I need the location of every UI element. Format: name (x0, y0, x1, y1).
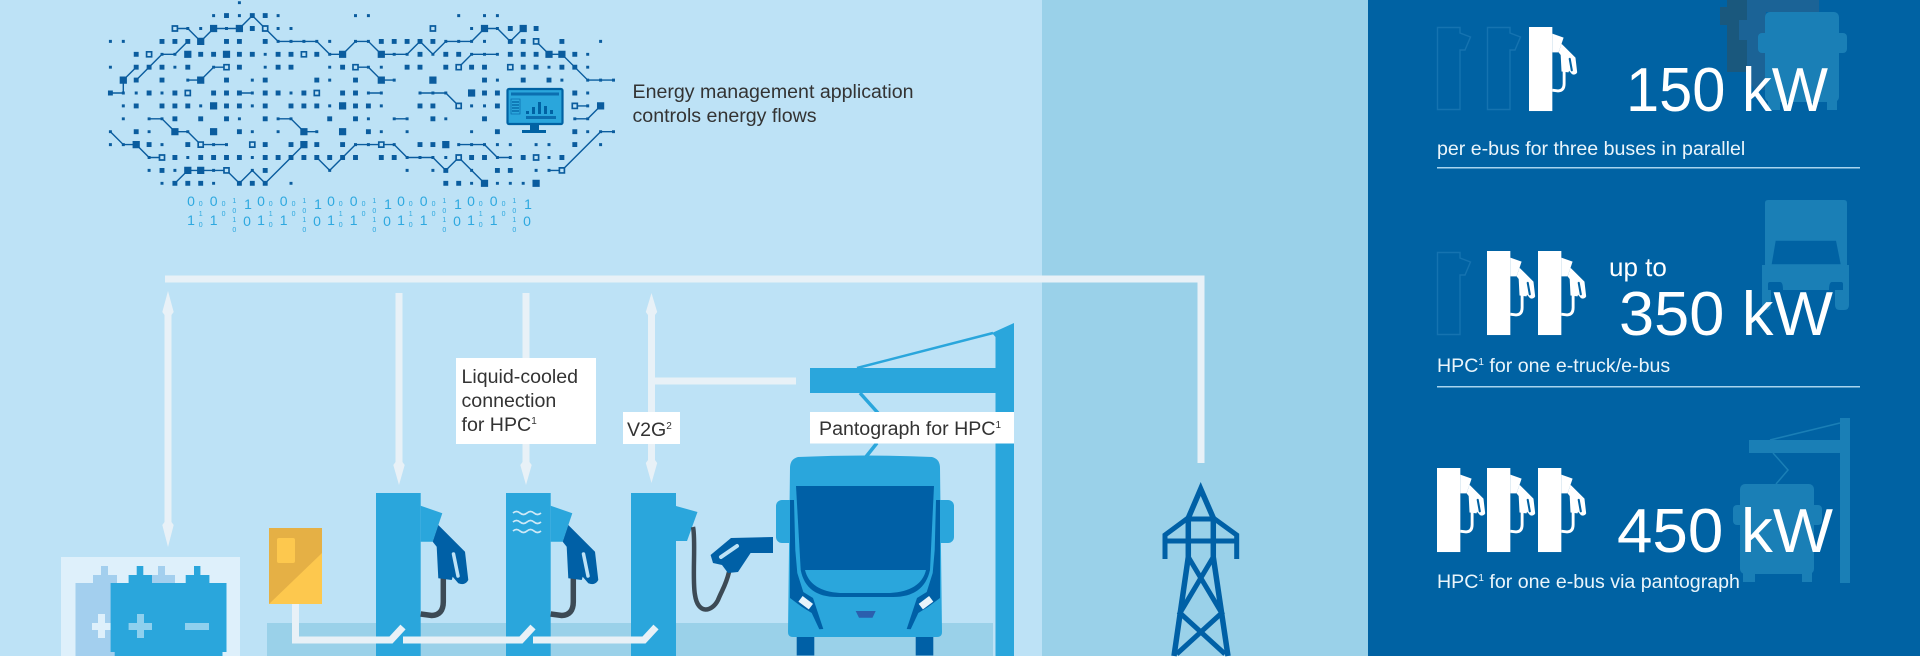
binary digits: 11111 (199, 211, 483, 218)
icon: electric bus (776, 456, 954, 656)
binary digits: 11111 (232, 217, 516, 224)
icon: transmission tower (1163, 489, 1238, 656)
icon: chargers one of three active (1438, 27, 1577, 111)
panel: grid background (1042, 0, 1368, 656)
text: energy management caption: Energy management application (632, 81, 914, 103)
ghost vehicle: pantograph bus (1733, 418, 1850, 583)
panel: power outputs background (1368, 0, 1920, 656)
value: 150 kW: 150 kW (1626, 56, 1828, 125)
charger 1 (376, 493, 468, 656)
value: up to 350 kW: 350 kW (1619, 280, 1833, 349)
value: 450 kW: 450 kW (1617, 497, 1833, 566)
text: HPC one e-bus: for one e-bus via pantograph (1484, 571, 1740, 593)
binary digits: 00000 (222, 211, 506, 218)
icon: battery storage (61, 557, 240, 656)
label: liquid-cooled connection: 1 (531, 416, 537, 427)
text: HPC one e-bus: 1 (1478, 573, 1484, 584)
pantograph gantry (810, 323, 1014, 656)
label: liquid-cooled connection: connection (462, 390, 556, 412)
binary digits: 00000 (243, 213, 531, 229)
text: energy management caption: controls energy flows (632, 105, 817, 127)
label: pantograph: 1 (995, 420, 1001, 431)
binary digits: 11111 (232, 198, 516, 205)
text: HPC one e-bus: HPC (1437, 571, 1478, 593)
label: liquid-cooled connection: Liquid-cooled (462, 366, 578, 388)
label: liquid-cooled connection (456, 358, 596, 444)
icon: chargers two of three active (1438, 251, 1586, 335)
value: up to 350 kW: up to (1609, 252, 1667, 282)
binary digits: 00000 (199, 222, 483, 229)
text: HPC one e-truck: HPC (1437, 355, 1478, 377)
panel: energy management background (0, 0, 1042, 656)
power lines and arrows (162, 276, 1204, 547)
text: HPC one e-truck: for one e-truck/e-bus (1484, 355, 1670, 377)
binary digits (187, 193, 532, 234)
ghost vehicle: three buses (1720, 0, 1847, 110)
charger 3 V2G (631, 493, 773, 656)
row: 350 kW (1437, 251, 1860, 388)
text: per e-bus: per e-bus for three buses in parallel (1437, 138, 1745, 160)
ground strip (267, 623, 993, 656)
icon: chargers three of three active (1437, 468, 1586, 552)
label: V2G: 2 (666, 421, 672, 432)
label: pantograph (810, 412, 1014, 444)
binary digits: 00000 (232, 208, 516, 215)
text: HPC one e-truck: 1 (1478, 357, 1484, 368)
binary digits: 00000 (232, 227, 516, 234)
value: up to 350 kW (1609, 252, 1833, 349)
binary digits: 0000000000 (199, 201, 506, 208)
ghost vehicle: truck (1762, 200, 1849, 310)
binary digits: 1111111111 (187, 212, 498, 228)
binary digits: 0000000000 (187, 193, 498, 209)
wiring between chargers (296, 604, 656, 640)
row: 450 kW (1437, 468, 1833, 593)
icon: water waves (513, 512, 541, 532)
row: 150 kW (1437, 27, 1860, 168)
icon: monitor with charts (508, 89, 562, 133)
binary digits: 11111 (244, 196, 532, 212)
label: pantograph: Pantograph for HPC (819, 418, 995, 440)
label: liquid-cooled connection: for HPC (462, 414, 531, 436)
icon: solar inverter box (269, 528, 322, 604)
charger 2 liquid-cooled (506, 493, 598, 656)
label: V2G (623, 412, 680, 444)
data network graphic (110, 3, 614, 234)
label: V2G: V2G (627, 419, 666, 441)
